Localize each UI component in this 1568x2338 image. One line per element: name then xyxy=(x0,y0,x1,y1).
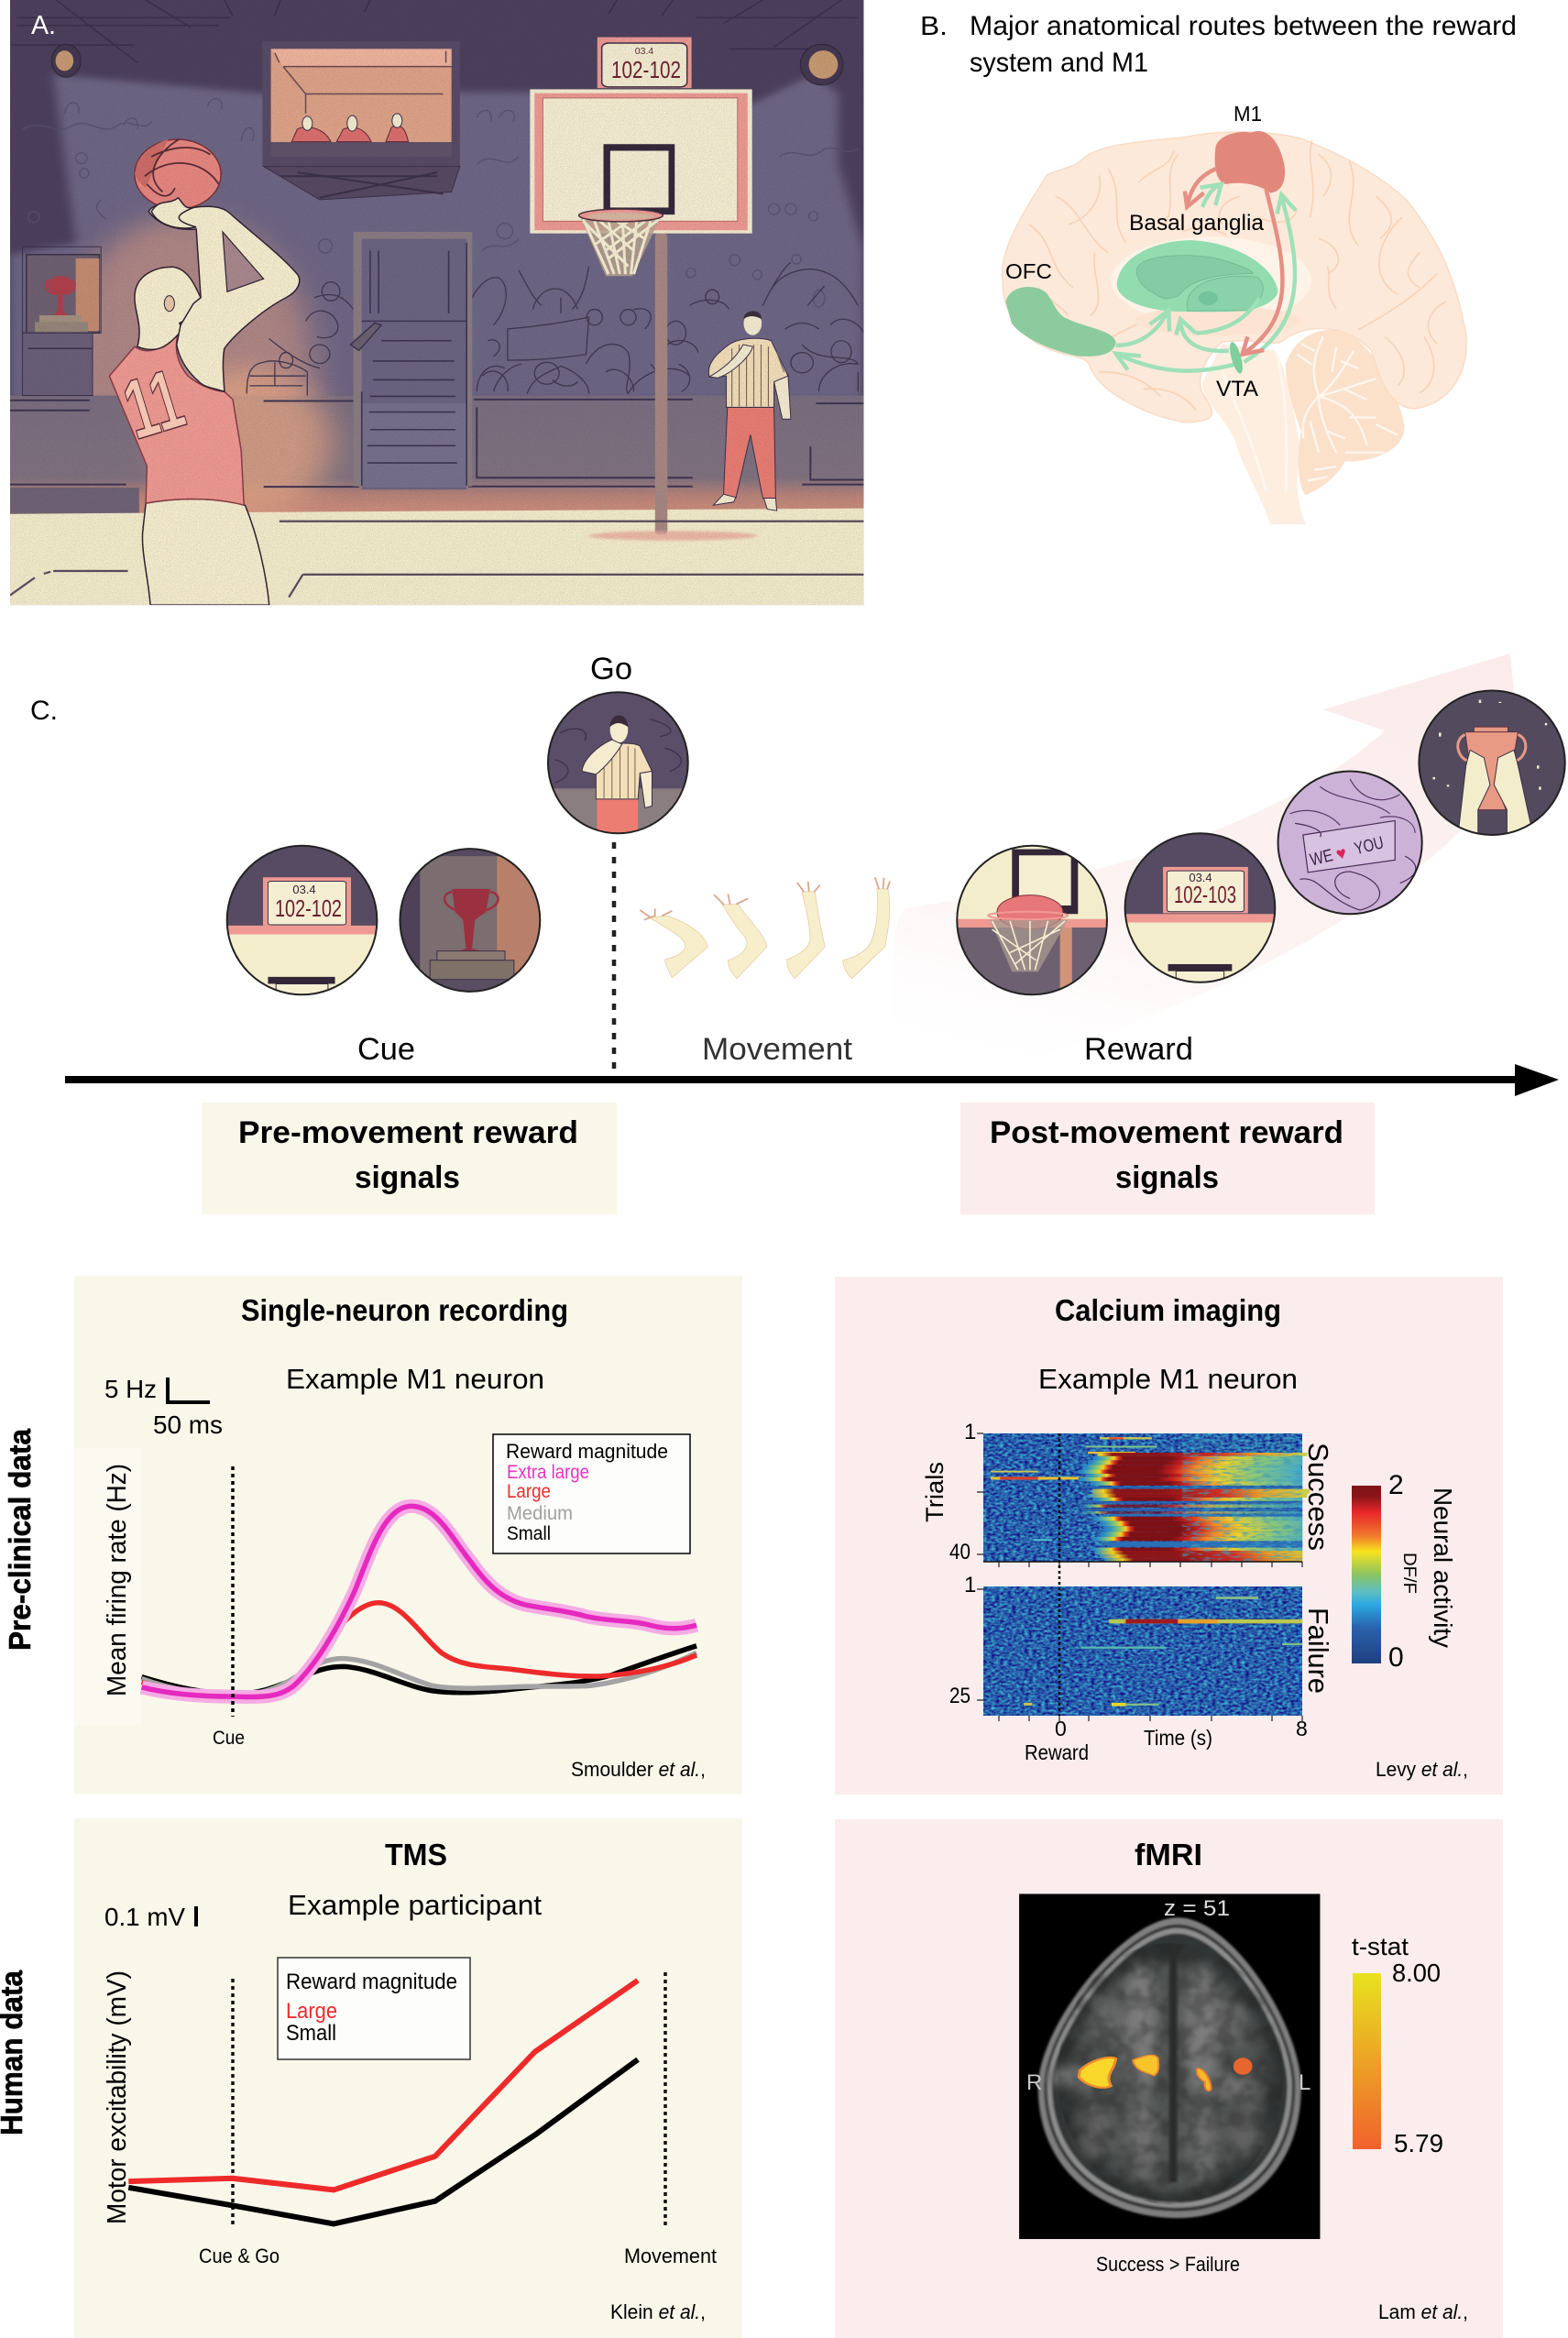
shorts xyxy=(142,499,269,605)
scoreboard digits in circles xyxy=(275,871,1236,922)
officials box xyxy=(262,41,460,200)
heatmap axis labels: 25 xyxy=(949,1684,970,1708)
banner text: WE xyxy=(1308,846,1335,871)
corpus callosum xyxy=(1111,236,1311,324)
brain labels: OFC xyxy=(1005,259,1052,283)
scale bar xyxy=(104,1375,223,1439)
row label: pre-clinical data: Pre-clinical data xyxy=(3,1428,37,1651)
timeline labels: Cue xyxy=(357,1032,415,1067)
cortical mottling xyxy=(1038,1917,1303,2220)
scan annotations: L xyxy=(1299,2070,1310,2095)
heatmap axis labels: Trials xyxy=(921,1462,948,1522)
panel: fMRI xyxy=(835,1819,1503,2338)
heatmap axis labels: Failure xyxy=(1302,1608,1334,1694)
arena background xyxy=(10,0,863,605)
heatmap axis labels: 40 xyxy=(949,1540,970,1564)
colour bar: t-stat: 5.79 xyxy=(1394,2129,1443,2157)
legend: Large xyxy=(507,1481,551,1502)
banner text: ♥ xyxy=(1334,843,1349,864)
heatmap axis labels: 1 xyxy=(964,1420,976,1444)
scan annotations xyxy=(1026,1896,1310,2095)
heatmap axis labels: 8 xyxy=(1296,1717,1308,1740)
label Go: Go xyxy=(590,652,632,686)
heatmap axis labels: 0 xyxy=(1055,1717,1067,1740)
reward marker xyxy=(1058,1433,1060,1716)
colour bar: neural activity: 0 xyxy=(1388,1642,1404,1673)
floor lines xyxy=(10,521,863,598)
legend: Small xyxy=(286,2021,336,2046)
jersey xyxy=(109,329,244,505)
heading: TMS xyxy=(385,1838,447,1871)
legend: Reward magnitude xyxy=(286,1970,457,1994)
panel: TMS xyxy=(74,1818,742,2338)
timeline labels: Reward xyxy=(1084,1032,1193,1067)
circle: referee xyxy=(545,690,695,835)
scoreboard digits in circles: 03.4 xyxy=(292,883,316,896)
panel B: brain routes xyxy=(920,11,1517,524)
subheading: Example M1 neuron xyxy=(286,1363,544,1395)
panel C: timeline xyxy=(30,652,1568,1214)
legend xyxy=(493,1434,690,1553)
colour bar: t-stat: t-stat xyxy=(1352,1933,1409,1960)
gap between arms xyxy=(223,232,264,291)
scoreboard digits in circles: 03.4 xyxy=(1189,871,1212,884)
panel C label: C. xyxy=(30,696,58,726)
circle: ball through hoop xyxy=(955,844,1110,997)
circle outline 5 xyxy=(1125,833,1275,982)
scoreboard digits: 03.4 xyxy=(635,46,653,57)
OFC xyxy=(1005,287,1116,357)
VTA marker xyxy=(1227,341,1245,374)
panel B title: Major anatomical routes between the reward xyxy=(970,11,1517,41)
box: post-movement: Post-movement reward xyxy=(990,1115,1343,1150)
heatmap: success trials xyxy=(983,1433,1310,1562)
legend: Medium xyxy=(507,1503,573,1524)
box: pre-movement xyxy=(202,1103,617,1214)
box: pre-movement: Pre-movement reward xyxy=(238,1115,578,1150)
arms xyxy=(148,198,300,391)
scan annotations: R xyxy=(1026,2070,1042,2095)
circle outline 1 xyxy=(227,846,377,994)
citation: Lam et al., xyxy=(1378,2300,1468,2323)
scoreboard xyxy=(598,38,692,88)
heatmap axis labels: Success xyxy=(1302,1443,1334,1551)
ceiling trusses xyxy=(11,0,858,62)
panel B label: B. xyxy=(920,12,948,41)
caption: Success > Failure xyxy=(1096,2253,1240,2276)
brain labels: Basal ganglia xyxy=(1129,211,1265,236)
sulci xyxy=(1029,140,1446,411)
hot rows block 2 xyxy=(1080,1489,1310,1514)
hot rows block 4 xyxy=(1091,1548,1302,1562)
panel B title: system and M1 xyxy=(970,48,1148,78)
citation: Smoulder et al., xyxy=(571,1758,706,1781)
timeline labels: Movement xyxy=(702,1032,853,1067)
x-axis labels: Cue & Go xyxy=(199,2245,280,2267)
x-axis labels: Movement xyxy=(624,2245,717,2267)
fingers xyxy=(151,198,196,228)
circle scenes xyxy=(220,689,1568,997)
hot rows block 1 xyxy=(1079,1453,1308,1486)
go dotted line xyxy=(612,842,616,1081)
icon: arm movement sequence xyxy=(640,877,890,979)
circle outline 6 xyxy=(1278,772,1422,914)
heading: fMRI xyxy=(1135,1838,1202,1871)
green route arrows xyxy=(1116,184,1296,371)
grain texture xyxy=(10,0,863,605)
colour bar: t-stat: 8.00 xyxy=(1392,1959,1441,1987)
player xyxy=(109,139,300,605)
citation: Klein et al., xyxy=(610,2300,706,2323)
circle: banner xyxy=(1270,769,1430,916)
circle outline 4 xyxy=(957,846,1107,994)
circle outline 3 xyxy=(548,692,688,833)
stairway xyxy=(350,232,472,489)
timeline labels xyxy=(357,1032,1193,1067)
x-axis labels xyxy=(199,2245,717,2267)
heatmap axis labels: Reward xyxy=(1025,1740,1089,1764)
box: pre-movement: signals xyxy=(355,1160,460,1195)
reward sweep arrow xyxy=(890,653,1520,1064)
heading: Single-neuron recording xyxy=(241,1293,568,1327)
colour bar: neural activity xyxy=(1352,1470,1457,1673)
cue label: Cue xyxy=(213,1728,245,1749)
M1 xyxy=(1215,131,1285,192)
circle: hands holding trophy xyxy=(1415,689,1568,836)
scoreboard digits in circles: 102-103 xyxy=(1174,881,1236,908)
line chart: firing rates xyxy=(142,1506,696,1699)
pole shadow xyxy=(589,531,757,541)
thalamus region xyxy=(1135,306,1301,335)
stadium lamps xyxy=(51,44,843,85)
brain scan xyxy=(1019,1893,1320,2239)
brain labels: M1 xyxy=(1234,102,1262,126)
legend: Small xyxy=(507,1523,551,1544)
colour bar: neural activity: Neural activity xyxy=(1429,1487,1457,1648)
brain labels xyxy=(1005,102,1265,401)
cue and go marker xyxy=(231,1979,235,2226)
cortex xyxy=(1047,1961,1267,2192)
circle: scoreboard 102-103 xyxy=(1120,831,1285,984)
scale bar: 0.1 mV xyxy=(104,1903,185,1931)
panel A: basketball free-throw illustration xyxy=(10,0,863,605)
box: post-movement: signals xyxy=(1115,1160,1219,1195)
scoreboard digits xyxy=(611,46,681,83)
cue marker xyxy=(231,1466,235,1717)
circle: trophy xyxy=(395,847,545,995)
heatmap ticks xyxy=(977,1433,1302,1721)
line chart: motor excitability xyxy=(128,1981,638,2223)
hot rows block 3 xyxy=(1092,1517,1302,1541)
backboard xyxy=(530,89,752,234)
skull rings xyxy=(1038,1917,1301,2218)
heatmap axis labels: Time (s) xyxy=(1144,1726,1212,1750)
upper crowd doodles xyxy=(22,99,858,307)
trophy cabinet xyxy=(22,247,101,396)
heatmap axis labels: 1 xyxy=(964,1573,976,1597)
lower crowd doodles xyxy=(247,262,863,396)
speckle over heat tail xyxy=(1182,1433,1302,1562)
heatmap: failure trials xyxy=(983,1586,1302,1716)
scale bar: 50 ms xyxy=(153,1410,223,1439)
heading: Calcium imaging xyxy=(1055,1293,1281,1327)
colour bar: t-stat xyxy=(1352,1933,1443,2157)
head xyxy=(135,267,203,349)
basal ganglia xyxy=(1117,240,1277,312)
time arrow xyxy=(65,1064,1559,1096)
panel B title xyxy=(970,11,1517,78)
brain diagram xyxy=(1003,131,1466,524)
citation: Levy et al., xyxy=(1376,1758,1468,1781)
pole xyxy=(655,233,667,534)
legend xyxy=(278,1958,470,2059)
circle outline 7 xyxy=(1419,691,1565,835)
movement marker xyxy=(663,1972,667,2228)
y-axis label: Mean firing rate (Hz) xyxy=(103,1464,132,1696)
activation blobs xyxy=(1079,2055,1253,2091)
jersey number: 11 xyxy=(114,352,194,458)
circle: scoreboard 102-102 xyxy=(227,847,376,993)
scan annotations: z = 51 xyxy=(1164,1896,1230,1921)
subheading: Example participant xyxy=(288,1889,542,1921)
scoreboard digits: 102-102 xyxy=(611,56,681,83)
red route arrows xyxy=(1185,169,1282,355)
panel: single-neuron recording xyxy=(74,1276,742,1794)
panel label A: A. xyxy=(31,11,56,40)
banner text xyxy=(1308,833,1386,871)
banner text: YOU xyxy=(1353,833,1386,859)
box: post-movement xyxy=(960,1103,1375,1214)
legend: Reward magnitude xyxy=(506,1440,668,1463)
brain labels: VTA xyxy=(1216,377,1258,401)
y-axis label: Motor excitability (mV) xyxy=(103,1970,132,2224)
scale bar: 5 Hz xyxy=(104,1375,157,1403)
brainstem xyxy=(1202,344,1306,524)
referee xyxy=(708,311,791,510)
cerebellum xyxy=(1286,330,1405,495)
colour bar: neural activity: 2 xyxy=(1388,1470,1404,1500)
legend: Large xyxy=(286,1999,337,2024)
barrier lines xyxy=(10,400,863,487)
circle outline 2 xyxy=(400,849,540,992)
basketball xyxy=(135,139,221,209)
legend: Extra large xyxy=(507,1462,589,1483)
cerebrum xyxy=(1003,132,1466,423)
hoop and net xyxy=(579,209,663,276)
colour bar: neural activity: DF/F xyxy=(1399,1553,1419,1594)
scoreboard digits in circles: 102-102 xyxy=(275,895,342,922)
heatmap axis labels xyxy=(921,1420,1334,1764)
panel: calcium imaging xyxy=(835,1277,1503,1795)
subheading: Example M1 neuron xyxy=(1038,1363,1298,1395)
